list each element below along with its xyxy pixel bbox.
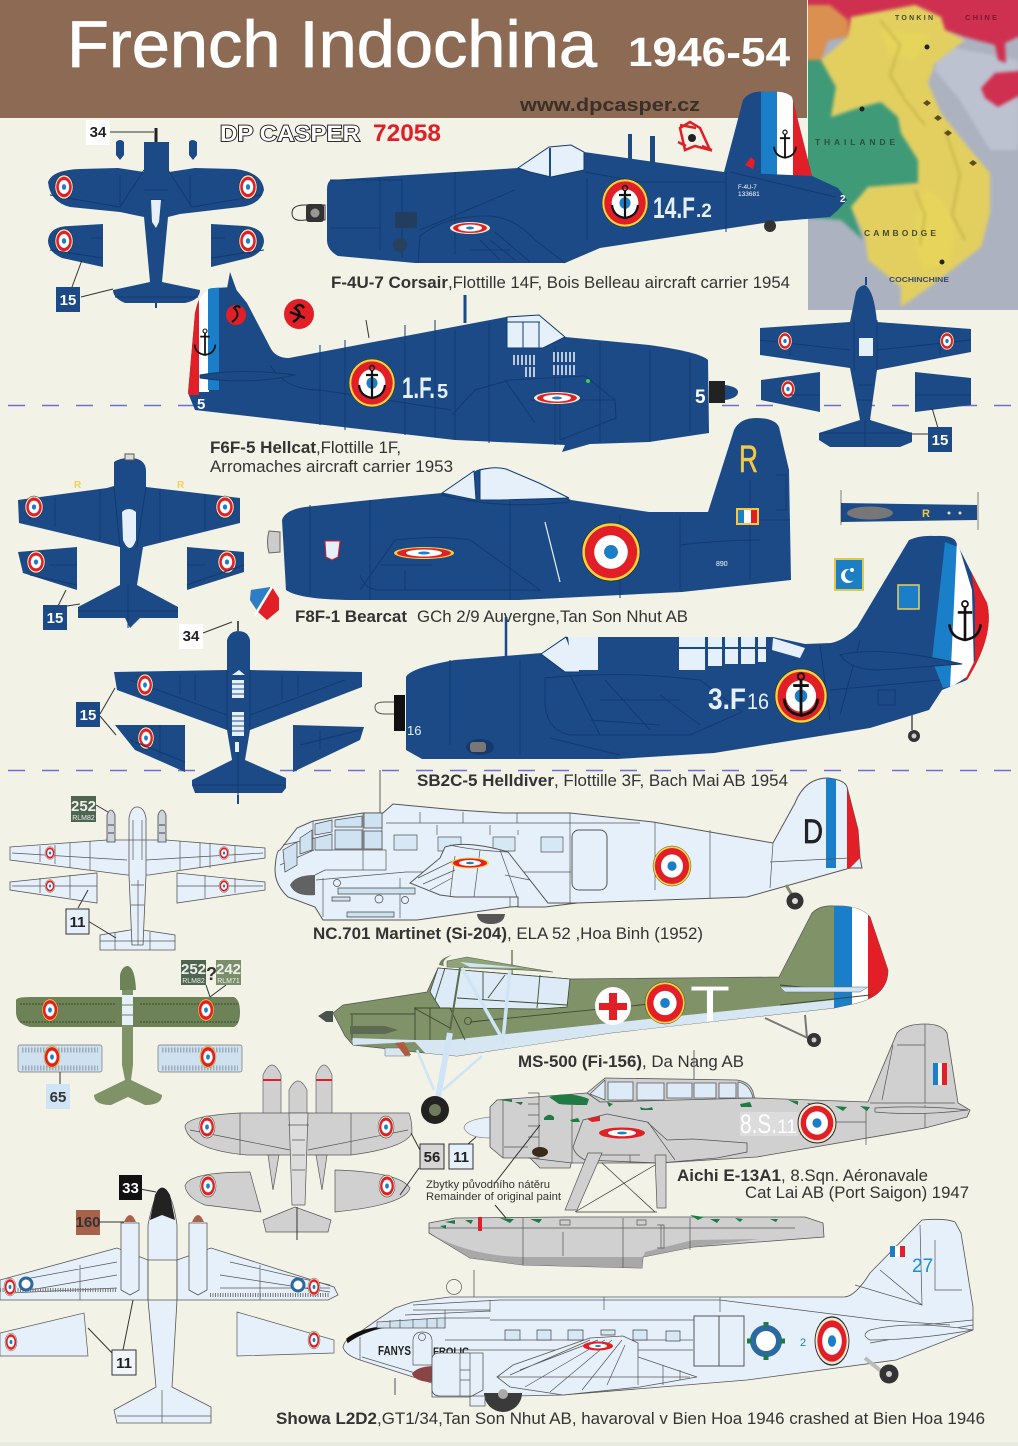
wing strip with code R [841,490,978,530]
icon: Auvergne squadron badge [250,587,279,620]
header band [0,0,807,118]
caption: Hellcat: ,Flottille 1F, [316,439,401,457]
aircraft: Hellcat side view: 5 [695,387,706,408]
aircraft: Aichi top view [185,1065,420,1240]
date range: 1946-54 [628,29,790,75]
label: RLM 252: RLM82 [72,815,95,822]
aircraft: Showa side view: 27 [912,1256,933,1277]
caption: NC.701: , ELA 52 ,Hoa Binh (1952) [507,925,703,943]
aircraft: Bearcat top view: R [74,480,82,491]
note: original paint: Zbytky původního nátěru [426,1179,550,1191]
label: colour 34 [86,120,110,145]
aircraft: Corsair top view [48,128,264,308]
note: original paint [426,1179,561,1203]
aircraft: Showa side view: FANYS [378,1343,411,1358]
label: colour 15: 15 [80,707,96,724]
caption: Helldiver [417,772,788,790]
label: colour 65 [46,1084,70,1109]
label: RLM 252 [71,796,96,822]
aircraft: Bearcat side view: 890 [716,561,728,568]
aircraft: Helldiver side view: 3.F [708,683,746,716]
label: colour 11 [449,1144,473,1169]
aircraft: MS-500 top view [16,966,242,1105]
label: colour 34 [179,624,203,649]
caption: Aichi: Aichi E-13A1 [677,1167,781,1185]
caption: Hellcat: F6F-5 Hellcat [210,439,317,457]
aircraft: Bearcat side view: R [739,439,758,481]
label: RLM 242: 242 [216,961,241,978]
aircraft: NC.701 side view: D [803,813,823,851]
label: colour 65: 65 [50,1089,66,1106]
map of Indochina: CHINE [965,13,997,22]
label: RLM 242: RLM71 [217,978,240,985]
caption: Bearcat: F8F-1 Bearcat [295,608,408,626]
aircraft: Aichi side view: 8.S. [740,1109,777,1139]
aircraft: Corsair side view: F-4U-7 [738,185,757,191]
aircraft: Helldiver side view: 16 [407,723,421,738]
aircraft: Bearcat side view [268,418,791,600]
caption: Corsair: ,Flottille 14F, Bois Belleau aircraft carrier 1954 [448,274,790,292]
brand logo: DP CASPER [220,121,360,146]
label: colour 160: 160 [75,1214,101,1231]
aircraft: Corsair side view: .2 [696,201,712,222]
label: colour 11: 11 [116,1355,132,1372]
question mark: ? [206,964,217,984]
label: colour 15 [43,605,67,630]
label: colour 15: 15 [60,292,76,309]
aircraft: Corsair side view: 2 [840,194,846,205]
label: colour 34: 34 [90,124,107,141]
label: colour 11: 11 [453,1149,469,1166]
icon: pirate skull decal [678,122,712,150]
label: colour 33: 33 [122,1180,139,1197]
aircraft: Hellcat side view [188,272,738,452]
label: colour 11 [112,1350,136,1375]
caption: Bearcat [295,608,688,626]
label: colour 33 [119,1175,142,1200]
caption: Aichi: Cat Lai AB (Port Saigon) 1947 [745,1184,969,1202]
icon: red seahorse decal [284,299,314,329]
caption: Showa: ,GT1/34,Tan Son Nhut AB, havaroval v Bien Hoa 1946 crashed at Bien Hoa 1946 [377,1410,985,1428]
map of Indochina: COCHINCHINE [889,277,949,284]
aircraft: Hellcat side view: 5 [197,396,205,413]
caption: MS-500: , Da Nang AB [642,1053,744,1071]
map of Indochina: TONKIN [895,15,933,22]
aircraft: Hellcat side view: 1.F. [402,372,435,405]
label: colour 160 [75,1210,101,1235]
label: RLM 242 [216,960,241,985]
label: colour 34: 34 [183,628,200,645]
caption: Aichi: , 8.Sqn. Aéronavale [781,1167,928,1185]
aircraft: NC.701 top view [10,805,265,950]
caption: MS-500 [518,1053,744,1071]
label: colour 15: 15 [932,432,948,449]
aircraft: Showa side view: 2 [800,1337,806,1349]
label: colour 15 [56,287,80,312]
label: colour 15 [76,702,100,727]
aircraft: Helldiver side view: 16 [747,689,769,714]
caption: Helldiver: SB2C-5 Helldiver [417,772,555,790]
aircraft: MS-500 side view [318,900,892,1124]
caption: Bearcat: GCh 2/9 Auvergne,Tan Son Nhut AB [417,608,688,626]
caption: Hellcat: Arromaches aircraft carrier 1953 [210,458,453,476]
map of Indochina [800,0,1018,310]
caption: Aichi [677,1167,969,1202]
label: colour 56: 56 [424,1149,440,1166]
map of Indochina: CAMBODGE [864,228,936,238]
label: RLM 252: 252 [71,798,96,815]
icon: crescent and star crest [835,559,863,590]
label: RLM 252: RLM82 [182,978,205,985]
label: colour 11 [66,909,89,934]
label: colour 15 [928,427,952,452]
kit number: 72058 [373,120,441,147]
aircraft: Hellcat side view: 5 [437,381,448,403]
label: colour 15: 15 [47,610,63,627]
map of Indochina: THAILANDE [815,137,895,147]
label: colour 11: 11 [70,914,85,931]
title: French Indochina [67,7,597,81]
aircraft: Showa side view [343,1219,973,1412]
caption: Helldiver: , Flottille 3F, Bach Mai AB 1954 [554,772,788,790]
aircraft: Helldiver top view [100,621,364,804]
website: www.dpcasper.cz [519,95,700,115]
label: colour 56 [420,1144,444,1169]
caption: NC.701: NC.701 Martinet (Si-204) [313,925,507,943]
aircraft: Corsair side view: 14.F [653,192,695,225]
label: RLM 252 [181,960,206,985]
note: original paint: Remainder of original paint [426,1191,561,1203]
aircraft: Hellcat top view [760,277,971,447]
aircraft: Showa top view [0,1188,338,1423]
aircraft: MS-500 side view: T [690,976,730,1032]
aircraft: Bearcat top view: R [177,480,185,491]
caption: Hellcat [210,439,453,476]
aircraft: Aichi side view [429,1024,970,1268]
aircraft: Corsair side view [292,88,847,263]
aircraft: NC.701 side view [275,770,862,924]
aircraft: Bearcat top view [18,454,244,628]
caption: NC.701 [313,925,703,943]
caption: Corsair: F-4U-7 Corsair [331,274,449,292]
aircraft: Aichi side view: 11 [777,1117,797,1138]
label: RLM 252: 252 [181,961,206,978]
aircraft: Corsair side view: 133681 [738,191,760,198]
aircraft: Helldiver side view [375,536,995,759]
caption: MS-500: MS-500 (Fi-156) [518,1053,642,1071]
wing strip with code R: R [922,508,930,520]
caption: Showa: Showa L2D2 [276,1410,377,1428]
aircraft: Showa side view: FROLIC [433,1346,469,1358]
